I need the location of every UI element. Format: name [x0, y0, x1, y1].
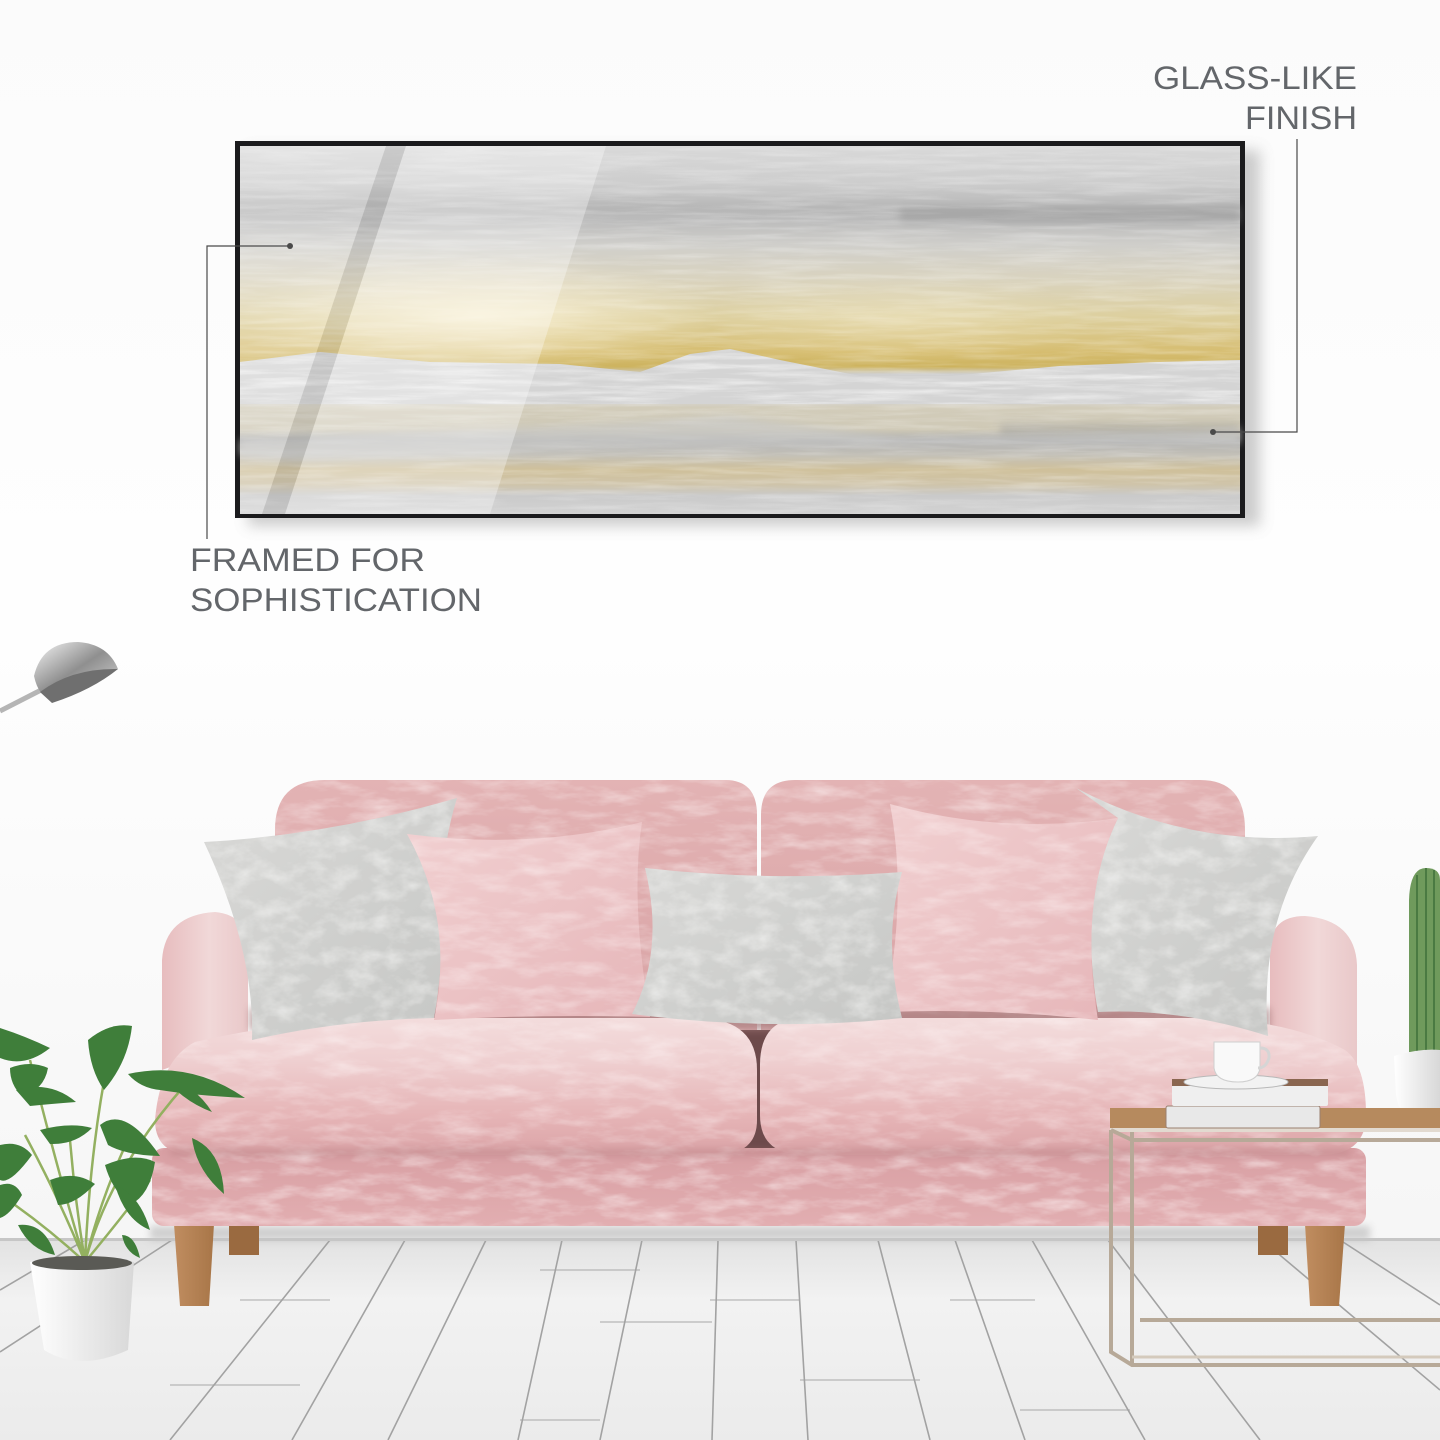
left seat cushion [155, 1018, 757, 1155]
callout: framed for sophistication [190, 243, 482, 618]
shadow under pillows [250, 1008, 1270, 1030]
callout: framed for sophistication: SOPHISTICATION [190, 582, 482, 618]
saucer [1184, 1075, 1288, 1089]
frame [235, 141, 1245, 518]
mountain reflection [240, 416, 1240, 460]
seat gap shadow [740, 1030, 780, 1156]
leader line [207, 246, 290, 539]
sofa legs [174, 1222, 1345, 1306]
label: FRAMED FOR [190, 542, 425, 578]
pink pillow right [884, 804, 1118, 1020]
left arm [162, 912, 248, 1070]
coffee table with books and cup [1110, 1042, 1440, 1365]
grey pillow left [204, 798, 457, 1040]
sofa base [152, 1148, 1366, 1226]
framed artwork [235, 141, 1260, 526]
potted plant [0, 1025, 245, 1361]
floor lamp [0, 642, 118, 711]
sofa [152, 780, 1366, 1306]
label: GLASS-LIKE [1153, 60, 1357, 96]
frame shadow [248, 150, 1260, 526]
leader line [1213, 139, 1297, 432]
callout: glass-like finish: FINISH [1245, 100, 1357, 136]
mountains [240, 349, 1240, 404]
callout: glass-like finish [1153, 60, 1357, 435]
right arm [1270, 916, 1357, 1072]
grey pillow right [1076, 788, 1318, 1036]
pink pillow left [407, 822, 650, 1020]
right seat cushion [760, 1018, 1366, 1155]
stems [15, 1060, 185, 1262]
grey pillow centre [632, 868, 902, 1024]
cup [1214, 1042, 1269, 1082]
sofa back [275, 780, 1245, 1040]
leaves [0, 1025, 245, 1258]
glass reflections [262, 146, 406, 514]
cactus in pot [1394, 868, 1440, 1124]
books [1166, 1079, 1328, 1128]
pot [30, 1257, 134, 1361]
painting [240, 146, 1240, 514]
floor [0, 1226, 1440, 1440]
table [1110, 1108, 1440, 1365]
